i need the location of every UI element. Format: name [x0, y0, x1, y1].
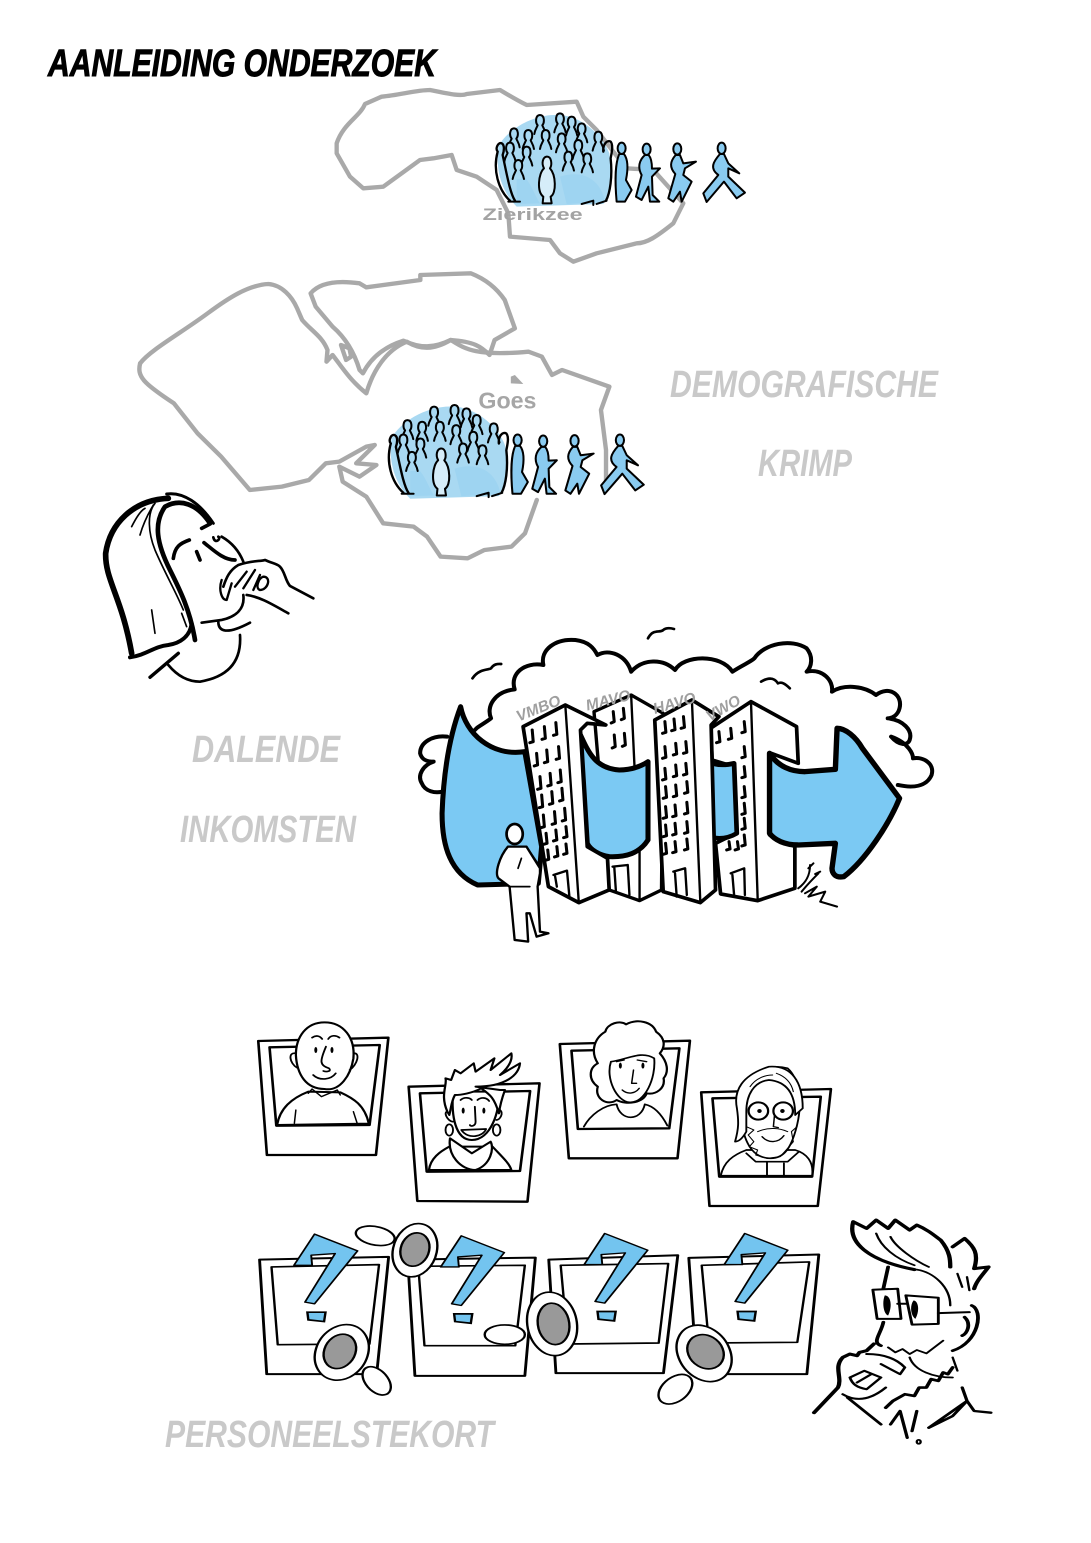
map: Walcheren and Beveland with Goes — [139, 273, 609, 558]
grass — [798, 863, 837, 907]
heading: personeelstekort: PERSONEELSTEKORT — [165, 1414, 496, 1456]
character: bearded man with glasses thinking — [814, 1220, 991, 1444]
person looking at schools — [497, 824, 548, 942]
clouds — [420, 640, 932, 792]
polaroid row: missing staff with question marks — [260, 1222, 819, 1408]
illustration: school buildings with arrow and clouds — [420, 628, 932, 942]
portrait: woman with windblown hair — [409, 1053, 540, 1202]
place label: Goes: Goes — [478, 387, 536, 413]
school building: VMBO — [523, 705, 609, 903]
polaroid row: staff portraits — [258, 1021, 831, 1206]
magnifier bottom right — [652, 1321, 740, 1408]
heading: dalende inkomsten: DALENDE — [192, 729, 341, 771]
magnifier middle — [485, 1291, 581, 1357]
label: MAVO: MAVO — [584, 687, 632, 715]
birds — [472, 628, 790, 688]
frame with question mark 4 — [689, 1233, 819, 1374]
arrow tail — [442, 707, 542, 885]
place label: Zierikzee: Zierikzee — [483, 205, 583, 224]
arrow segment 2 — [700, 753, 737, 838]
heading: dalende inkomsten: INKOMSTEN — [180, 809, 357, 851]
title: AANLEIDING ONDERZOEK — [47, 43, 438, 85]
frame with question mark 2 — [408, 1236, 535, 1376]
label: VWO: VWO — [703, 692, 744, 725]
heading: demografische krimp: KRIMP — [758, 443, 852, 485]
map: Schouwen-Duiveland with Zierikzee — [337, 90, 683, 262]
magnifier top — [352, 1222, 442, 1279]
school building: HAVO — [655, 700, 719, 903]
town marker — [511, 375, 523, 384]
heading: demografische krimp — [670, 364, 939, 485]
label: VMBO: VMBO — [514, 692, 563, 725]
portrait: bald man — [258, 1022, 388, 1155]
frame with question mark 1 — [260, 1234, 389, 1374]
school building: VWO back face — [710, 702, 798, 901]
character: woman thinking — [106, 494, 313, 682]
crowd with people walking away, middle — [389, 405, 644, 499]
portrait: woman with curly hair — [560, 1021, 690, 1158]
heading: dalende inkomsten — [180, 729, 357, 851]
magnifier bottom left — [308, 1321, 397, 1398]
label: HAVO: HAVO — [651, 690, 698, 718]
heading: demografische krimp: DEMOGRAFISCHE — [670, 364, 939, 406]
portrait: man with glasses and beard — [701, 1067, 831, 1206]
frame with question mark 3 — [549, 1233, 678, 1373]
crowd with people walking away, top — [496, 113, 745, 207]
arrow head — [770, 728, 900, 877]
arrow segment 1 — [580, 735, 648, 857]
school building: back — [594, 695, 663, 901]
